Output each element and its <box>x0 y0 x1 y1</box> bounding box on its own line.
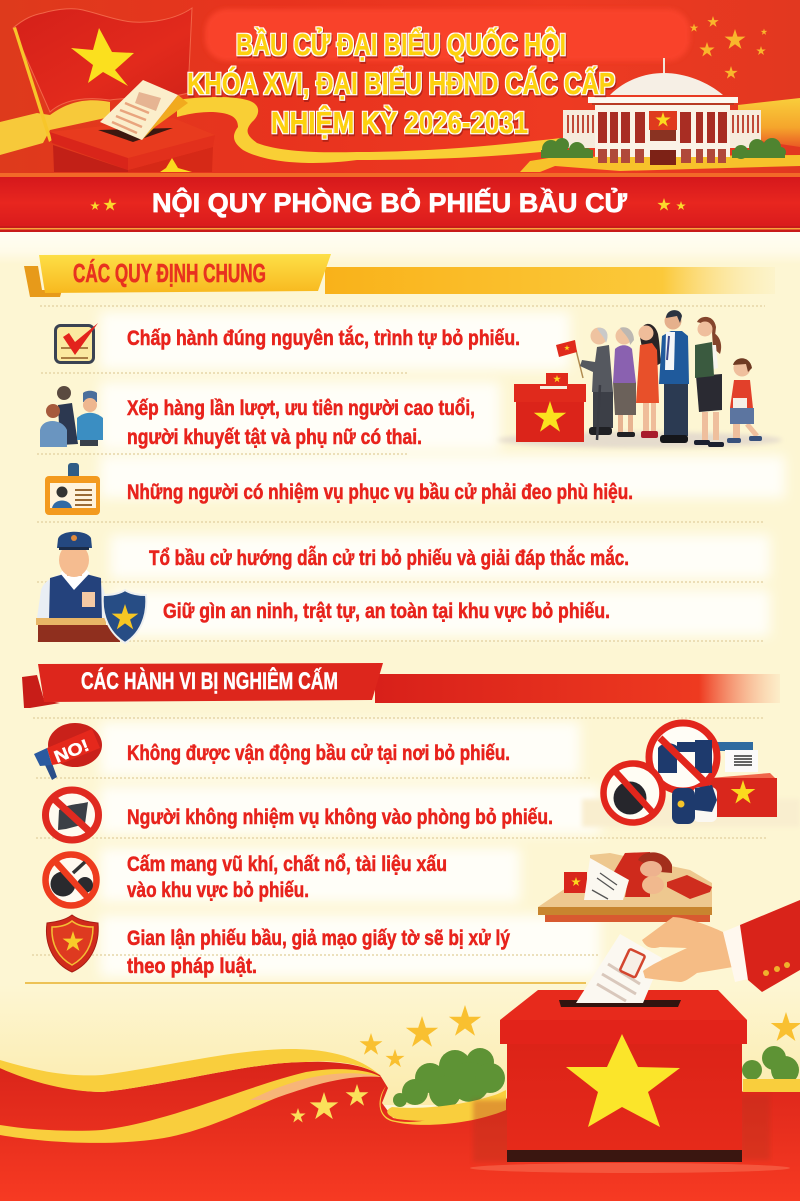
voter: woman in orange dress <box>636 324 661 438</box>
large ballot box <box>470 990 790 1173</box>
backpack <box>672 785 717 824</box>
icon: red shield star <box>46 915 98 972</box>
rule text: 3: Những người có nhiệm vụ phục vụ bầu cử phải đeo phù hiệu. <box>127 480 633 504</box>
heading stars <box>90 198 686 211</box>
panel: header background <box>0 0 800 176</box>
icon: prohibited weapons <box>46 854 96 906</box>
title <box>187 26 615 140</box>
panel: section heading general rules <box>24 254 775 297</box>
curl ribbon <box>380 1086 506 1125</box>
voter: woman in vest <box>694 317 724 447</box>
red mass <box>0 1062 800 1201</box>
panel: section heading general rules: CÁC QUY ĐỊNH CHUNG <box>73 258 266 288</box>
stars top right <box>690 16 767 79</box>
panel: prohibited acts list <box>127 741 553 978</box>
title: NHIỆM KỲ 2026-2031 <box>271 104 528 140</box>
forbidden box <box>710 742 777 817</box>
icon: checkbox <box>56 323 98 362</box>
ban text: 4: Gian lận phiếu bầu, giả mạo giấy tờ sẽ bị xử lý <box>127 926 510 950</box>
ban text: 1: Không được vận động bầu cử tại nơi bỏ phiếu. <box>127 741 510 765</box>
red heading band <box>0 173 800 232</box>
header ribbon <box>0 97 800 172</box>
ban text: 3: vào khu vực bỏ phiếu. <box>127 878 309 902</box>
top yellow ribbon <box>0 1049 380 1092</box>
illustration: prohibited items <box>582 723 800 827</box>
rule text: 2 <box>127 396 475 449</box>
rule text: 4: Tổ bầu cử hướng dẫn cử tri bỏ phiếu và giải đáp thắc mắc. <box>149 545 629 570</box>
ban text: 4: theo pháp luật. <box>127 954 257 978</box>
rule text: 2: Xếp hàng lần lượt, ưu tiên người cao tuổi, <box>127 396 475 420</box>
ban ring large <box>649 723 717 791</box>
voter: man in blue suit <box>659 310 689 443</box>
stars on ribbon <box>290 1084 368 1122</box>
ban text: 3 <box>127 852 447 902</box>
ban text: 2: Người không nhiệm vụ không vào phòng bỏ phiếu. <box>127 805 553 829</box>
bush <box>393 1046 799 1108</box>
footer background with ribbon <box>0 983 800 1201</box>
voter: elderly man <box>556 328 613 440</box>
illustration: person at desk <box>538 852 712 922</box>
main heading: NỘI QUY PHÒNG BỎ PHIẾU BẦU CỬ <box>152 188 627 218</box>
divider lines <box>32 306 766 955</box>
panel: general rules list <box>127 325 633 623</box>
cream body background <box>0 232 800 987</box>
header ballot box <box>50 80 215 172</box>
panel: section heading prohibited acts <box>22 663 780 708</box>
header flag <box>13 8 192 142</box>
icon: megaphone no: NO! <box>51 736 92 767</box>
rule text: 1: Chấp hành đúng nguyên tắc, trình tự bỏ phiếu. <box>127 325 520 350</box>
parliament building <box>541 58 786 165</box>
footer stars <box>360 1005 800 1067</box>
ban text: 4 <box>127 926 510 978</box>
voter: elderly woman <box>613 327 636 437</box>
icon: prohibited person <box>46 790 98 840</box>
icon: id badge <box>45 463 100 515</box>
rule text: 2: người khuyết tật và phụ nữ có thai. <box>127 425 422 449</box>
icon: megaphone no <box>34 723 102 780</box>
lower yellow ribbon <box>0 1069 381 1143</box>
icon: people queue <box>40 386 103 447</box>
icon: police shield <box>103 590 146 643</box>
rule text: 5: Giữ gìn an ninh, trật tự, an toàn tại khu vực bỏ phiếu. <box>163 599 610 623</box>
ban ring with bomb <box>604 764 662 822</box>
hand holding ballot <box>576 900 800 1003</box>
icon: election officer <box>36 532 120 642</box>
voter: child <box>727 358 762 443</box>
ban text: 3: Cấm mang vũ khí, chất nổ, tài liệu xấu <box>127 852 447 876</box>
title: KHÓA XVI, ĐẠI BIỂU HĐND CÁC CẤP <box>187 65 615 101</box>
small flag on box <box>546 373 568 385</box>
title: BẦU CỬ ĐẠI BIỂU QUỐC HỘI <box>236 26 566 62</box>
panel: section heading prohibited acts: CÁC HÀNH VI BỊ NGHIÊM CẤM <box>81 667 338 695</box>
illustration: voters queue at ballot box <box>498 310 782 448</box>
